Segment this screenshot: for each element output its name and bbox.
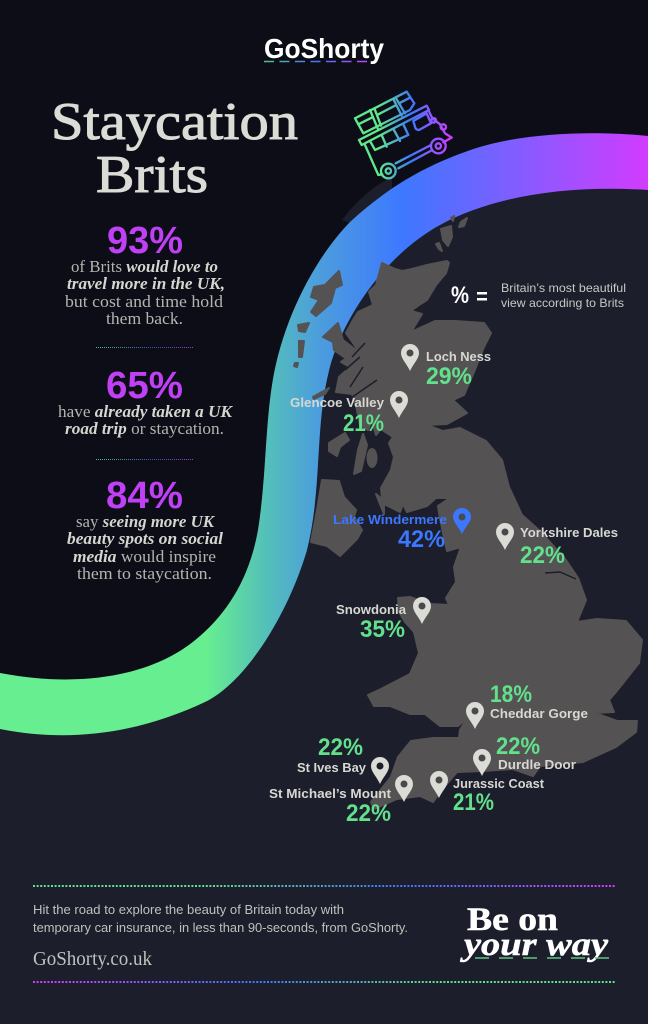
location: Jurassic Coast: 21%: [453, 789, 494, 816]
location: St Ives Bay: 22%: [318, 734, 363, 761]
Mull: [313, 388, 329, 399]
Uist: [294, 323, 309, 367]
location: Jurassic Coast: Jurassic Coast: [453, 777, 545, 791]
location: Cheddar Gorge: Cheddar Gorge: [490, 707, 588, 721]
background: dark upper panel: [0, 0, 648, 679]
legend: %: [451, 282, 469, 309]
mainland Britain: [336, 261, 642, 809]
location: Loch Ness: 29%: [426, 363, 472, 390]
location: St Michael's Mount: 22%: [346, 800, 391, 827]
legend: Britain’s most beautiful: [501, 281, 626, 295]
location: Lake Windermere: 42%: [398, 526, 445, 553]
Kintyre: [354, 434, 367, 474]
tagline: Be on your way: [459, 902, 612, 963]
stat: 93%: them back.: [106, 309, 183, 328]
location: Glencoe Valley: Glencoe Valley: [290, 396, 384, 410]
location: Cheddar Gorge: [466, 681, 588, 729]
footer text: [33, 902, 408, 970]
location: St Ives Bay: [297, 734, 389, 784]
ribbon shadow: [342, 177, 392, 224]
stat: 65%: 65%: [106, 365, 183, 407]
stat: 93%: [65, 220, 225, 328]
location: Durdle Door: Durdle Door: [498, 758, 576, 772]
stat: 84%: [67, 475, 223, 583]
stat: 93%: of Brits would love to: [71, 257, 218, 276]
ribbon road: [0, 133, 648, 735]
stat: 93%: 93%: [107, 220, 183, 262]
location: Snowdonia: Snowdonia: [336, 603, 407, 617]
title: [51, 93, 298, 204]
Orkney: [436, 216, 467, 251]
icon: truck with luggage: [355, 92, 452, 178]
Islay and Jura: [329, 433, 349, 456]
location: Snowdonia: [336, 597, 431, 643]
stat: 65%: [58, 365, 234, 438]
location: Jurassic Coast: [430, 771, 545, 816]
stat: 93%: travel more in the UK,: [67, 274, 225, 293]
location: Durdle Door: [473, 733, 576, 776]
sea lochs and Humber estuary: [345, 343, 576, 579]
map of Great Britain: [294, 216, 642, 809]
tagline: Be on your way: your way: [459, 927, 608, 963]
stat: 65%: road trip or staycation.: [65, 419, 224, 438]
stat: 84%: say seeing more UK: [76, 512, 216, 531]
location: Cheddar Gorge: 18%: [490, 681, 532, 708]
location: Snowdonia: 35%: [360, 616, 405, 643]
footer text: GoShorty.co.uk: [33, 948, 152, 970]
tagline: Be on your way: Be on: [467, 902, 558, 938]
footer text: Hit the road to explore the beauty of Britain today with: [33, 902, 344, 917]
stat: 84%: 84%: [106, 475, 183, 517]
legend: [451, 281, 626, 310]
location: Glencoe Valley: [290, 391, 408, 437]
Skye: [323, 323, 356, 359]
stat: 93%: but cost and time hold: [65, 292, 224, 311]
logo: GoShorty: [264, 33, 384, 64]
stat: 84%: them to staycation.: [77, 564, 212, 583]
footer text: temporary car insurance, in less than 90-seconds, from GoShorty.: [33, 920, 408, 935]
location: Yorkshire Dales: [496, 523, 618, 569]
location: Durdle Door: 22%: [496, 733, 540, 760]
location: St Michael's Mount: St Michael’s Mount: [269, 787, 392, 801]
title: Staycation: [51, 93, 298, 151]
location: Lake Windermere: [333, 508, 471, 553]
location: Yorkshire Dales: Yorkshire Dales: [520, 526, 618, 540]
Arran: [368, 449, 376, 467]
location: Glencoe Valley: 21%: [343, 410, 384, 437]
stat: 65%: have already taken a UK: [58, 402, 234, 421]
title: Brits: [96, 146, 208, 204]
stat: 84%: beauty spots on social: [67, 529, 223, 548]
location: Lake Windermere: Lake Windermere: [333, 513, 447, 527]
location: St Ives Bay: St Ives Bay: [297, 761, 366, 775]
location: Loch Ness: Loch Ness: [426, 350, 491, 364]
location: St Michael's Mount: [269, 775, 413, 827]
location: Loch Ness: [401, 344, 491, 390]
stat: 84%: media would inspire: [73, 547, 216, 566]
Lewis: [311, 271, 342, 316]
legend: view according to Brits: [501, 296, 624, 310]
location: Yorkshire Dales: 22%: [520, 542, 565, 569]
Ireland (north): [311, 480, 362, 556]
